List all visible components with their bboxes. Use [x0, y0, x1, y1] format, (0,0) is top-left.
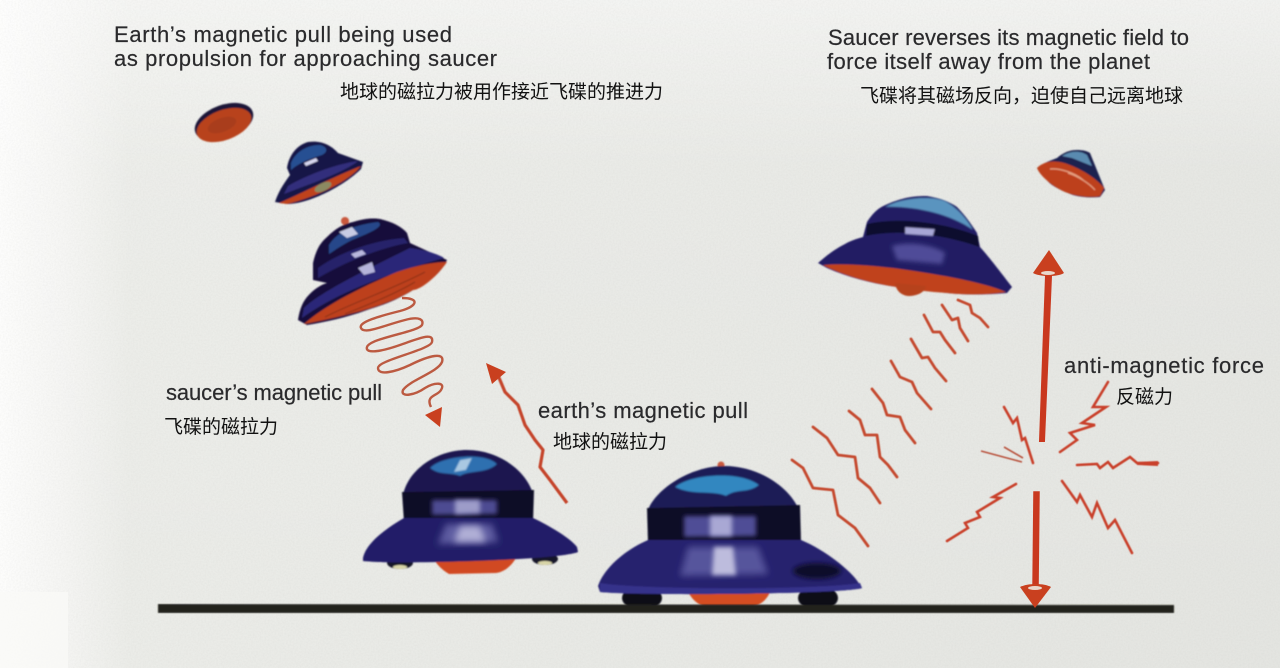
saucer 5: landed on ground	[598, 462, 862, 610]
heading: left: as propulsion for approaching saucer	[114, 46, 497, 71]
saucer 6: repelled from the ground	[818, 196, 1012, 296]
heading: left: Earth’s magnetic pull being used	[114, 22, 452, 47]
anti-magnetic down arrow	[1020, 492, 1051, 608]
heading: left: 地球的磁拉力被用作接近飞碟的推进力	[340, 81, 663, 103]
label: saucer's magnetic pull: 飞碟的磁拉力	[164, 416, 278, 438]
repelling force waves	[792, 300, 988, 546]
heading: left	[114, 22, 663, 103]
heading: right: force itself away from the planet	[827, 49, 1150, 74]
saucer 4: hovering near ground	[363, 450, 578, 574]
saucer 2: small approaching	[275, 142, 363, 204]
saucer 1: distant disc	[190, 96, 258, 149]
label: earth's magnetic pull	[538, 398, 748, 453]
ground line	[158, 604, 1174, 613]
saucer's magnetic pull spring arrow	[361, 298, 442, 427]
label: anti-magnetic force	[1064, 353, 1264, 408]
earth's magnetic pull arrow	[486, 363, 567, 503]
heading: right: 飞碟将其磁场反向，迫使自己远离地球	[860, 85, 1183, 107]
label: earth's magnetic pull: 地球的磁拉力	[553, 431, 667, 453]
label: saucer's magnetic pull	[164, 380, 382, 438]
heading: right	[827, 25, 1189, 107]
label: anti-magnetic force: anti-magnetic force	[1064, 353, 1264, 378]
label: anti-magnetic force: 反磁力	[1116, 386, 1173, 408]
saucer 7: distant departing	[1037, 150, 1105, 197]
anti-magnetic burst of lightning	[947, 382, 1158, 553]
anti-magnetic up arrow	[1033, 250, 1064, 441]
label: earth's magnetic pull: earth’s magnetic pull	[538, 398, 748, 423]
saucer 3: large approaching, tilted	[298, 217, 447, 325]
heading: right: Saucer reverses its magnetic field to	[828, 25, 1189, 50]
label: saucer's magnetic pull: saucer’s magnetic pull	[166, 380, 382, 405]
